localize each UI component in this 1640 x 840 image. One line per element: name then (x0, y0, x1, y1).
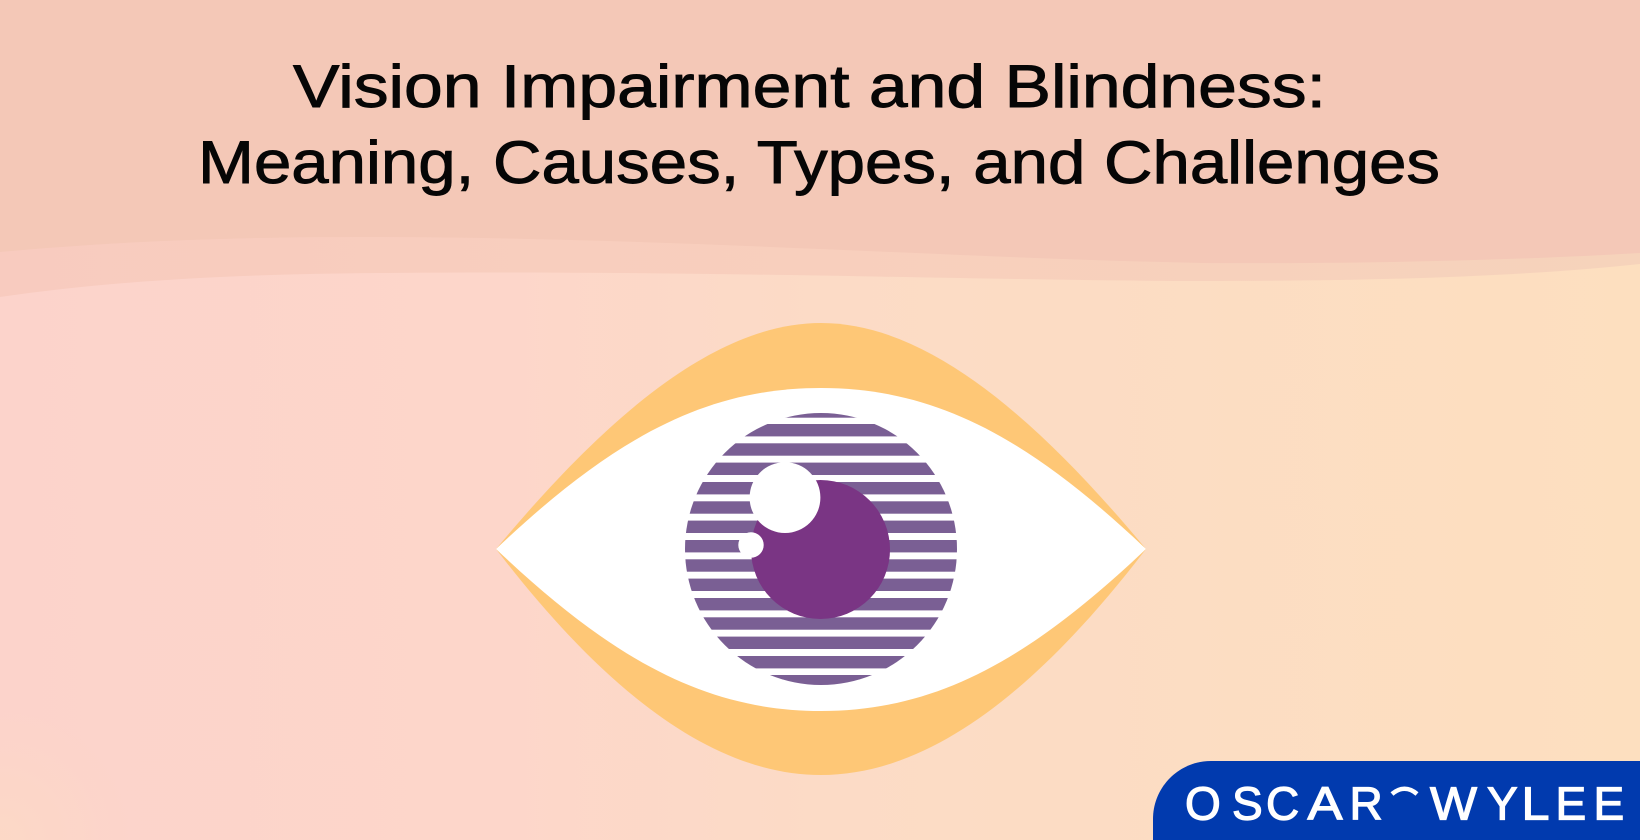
logo wordmark: A (1308, 778, 1343, 830)
logo arch mark (1392, 789, 1417, 794)
icon: eye (496, 323, 1146, 775)
pupil (751, 480, 890, 619)
title: Vision Impairment and Blindness: (293, 53, 1326, 120)
logo wordmark: EE (1556, 778, 1624, 830)
badge background (1153, 761, 1640, 840)
small highlight (738, 532, 764, 558)
logo wordmark: Y (1487, 778, 1518, 830)
logo wordmark (1185, 778, 1624, 830)
logo wordmark: OSC (1185, 778, 1299, 830)
sclera (496, 388, 1146, 711)
eyelid outer shape (496, 323, 1146, 775)
logo wordmark: W (1430, 778, 1478, 830)
large highlight (750, 462, 820, 533)
title (198, 53, 1440, 196)
logo wordmark: R (1350, 778, 1383, 830)
logo wordmark: L (1522, 778, 1550, 830)
middle wave band (0, 0, 1640, 297)
top header band (0, 0, 1640, 263)
logo badge (1153, 761, 1640, 840)
striped iris (680, 406, 962, 687)
title: Meaning, Causes, Types, and Challenges (198, 129, 1440, 196)
